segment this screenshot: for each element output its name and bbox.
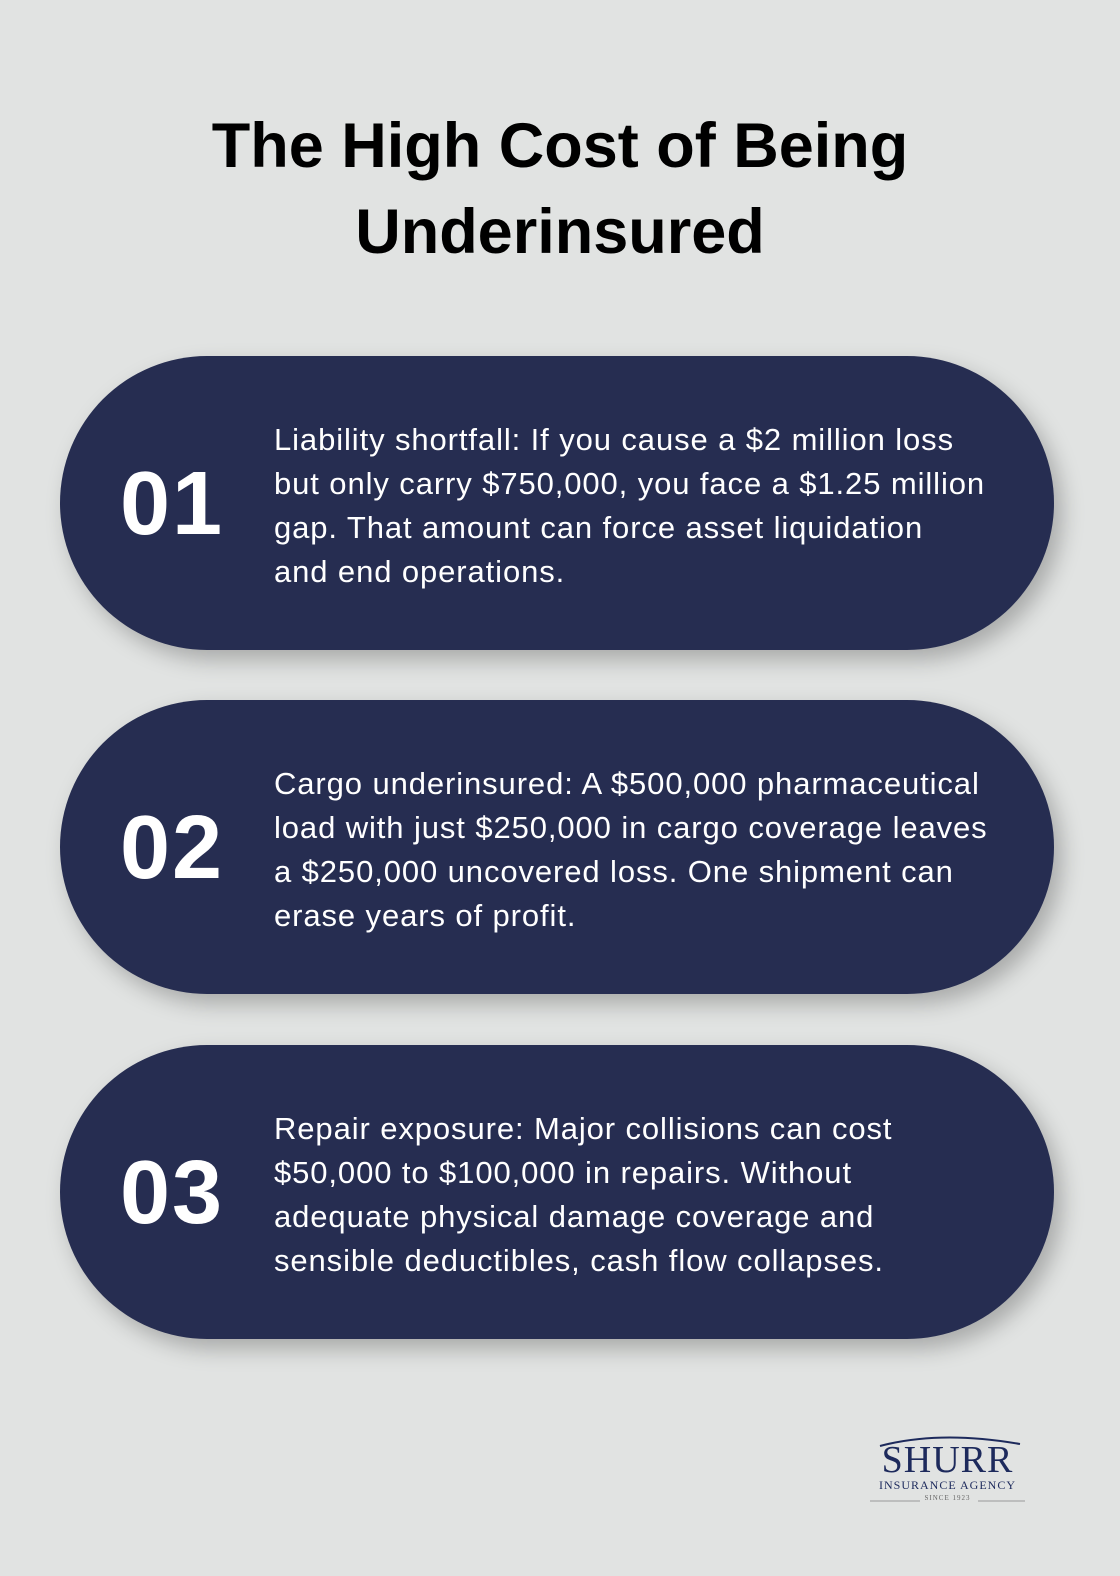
text 02: load with just $250,000 in cargo coverage leaves xyxy=(274,810,988,845)
text 01 xyxy=(274,422,985,589)
text 03: sensible deductibles, cash flow collapses. xyxy=(274,1243,884,1278)
text 01: gap. That amount can force asset liquidation xyxy=(274,510,923,545)
text 02: erase years of profit. xyxy=(274,898,576,933)
text 03 xyxy=(274,1111,892,1278)
text 02: a $250,000 uncovered loss. One shipment can xyxy=(274,854,954,889)
text 03: adequate physical damage coverage and xyxy=(274,1199,874,1234)
number 01: 01 xyxy=(120,454,224,554)
text 03: Repair exposure: Major collisions can cost xyxy=(274,1111,892,1146)
text 02 xyxy=(274,766,988,933)
title: Underinsured xyxy=(355,197,765,267)
text 01: but only carry $750,000, you face a $1.25 million xyxy=(274,466,985,501)
logo xyxy=(870,1436,1025,1502)
logo: INSURANCE AGENCY xyxy=(879,1478,1016,1492)
text 01: Liability shortfall: If you cause a $2 million loss xyxy=(274,422,954,457)
number 03: 03 xyxy=(120,1143,224,1243)
logo: SHURR xyxy=(882,1439,1013,1481)
text 01: and end operations. xyxy=(274,554,565,589)
card 03 xyxy=(60,1045,1054,1339)
title: The High Cost of Being xyxy=(212,111,908,181)
text 03: $50,000 to $100,000 in repairs. Without xyxy=(274,1155,852,1190)
title xyxy=(212,111,908,267)
number 02: 02 xyxy=(120,798,224,898)
card 02 xyxy=(60,700,1054,994)
text 02: Cargo underinsured: A $500,000 pharmaceutical xyxy=(274,766,980,801)
logo: SINCE 1923 xyxy=(924,1494,970,1502)
card 01 xyxy=(60,356,1054,650)
